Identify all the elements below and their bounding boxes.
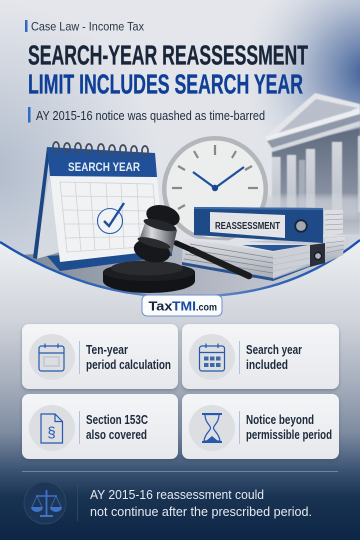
icon: document with section sign: § bbox=[47, 424, 56, 442]
panel: ten-year period calculation: period calculation bbox=[86, 358, 171, 372]
courthouse building bbox=[265, 93, 360, 235]
icon: desk calendar: SEARCH YEAR bbox=[68, 160, 140, 174]
panel: notice beyond permissible period: permissible period bbox=[246, 428, 332, 442]
panel: search year included: included bbox=[246, 358, 288, 372]
table surface inside arc bbox=[18, 235, 360, 297]
subtitle: AY 2015-16 notice was quashed as time-barred bbox=[36, 109, 265, 123]
conclusion banner bbox=[24, 482, 312, 524]
icon: reassessment binders bbox=[182, 207, 345, 281]
logo: TaxTMI.com: TMI bbox=[172, 298, 196, 314]
panel: notice beyond permissible period bbox=[182, 394, 339, 459]
lower curved panel with blue arc bbox=[0, 240, 360, 322]
panel: ten-year period calculation bbox=[22, 324, 178, 389]
conclusion banner: AY 2015-16 reassessment could bbox=[90, 487, 264, 502]
panel: section 153C also covered: also covered bbox=[86, 428, 147, 442]
icon: calendar with filled dates bbox=[200, 344, 224, 371]
icon: gavel bbox=[103, 202, 249, 293]
icon: wall clock bbox=[162, 136, 268, 242]
icon: document with section sign bbox=[41, 414, 62, 443]
panel: section 153C also covered: Section 153C bbox=[86, 413, 148, 427]
fog over building base bbox=[255, 196, 360, 218]
panel: search year included: Search year bbox=[246, 343, 302, 357]
logo: TaxTMI.com bbox=[142, 295, 222, 316]
panel: ten-year period calculation: Ten-year bbox=[86, 343, 128, 357]
icon: calendar outline bbox=[39, 344, 64, 371]
icon: scales of justice bbox=[31, 490, 62, 517]
conclusion banner: not continue after the prescribed period. bbox=[90, 504, 312, 519]
title bbox=[28, 40, 308, 100]
panel: section 153C also covered bbox=[22, 394, 178, 459]
panel: notice beyond permissible period: Notice beyond bbox=[246, 413, 314, 427]
icon: hourglass bbox=[202, 413, 222, 443]
logo: TaxTMI.com: .com bbox=[196, 302, 217, 314]
logo: TaxTMI.com: Tax bbox=[148, 298, 173, 314]
tag line: Case Law - Income Tax bbox=[31, 20, 144, 34]
panel: search year included bbox=[182, 324, 339, 389]
icon: reassessment binders: REASSESSMENT bbox=[215, 220, 280, 232]
icon: desk calendar bbox=[33, 142, 172, 271]
